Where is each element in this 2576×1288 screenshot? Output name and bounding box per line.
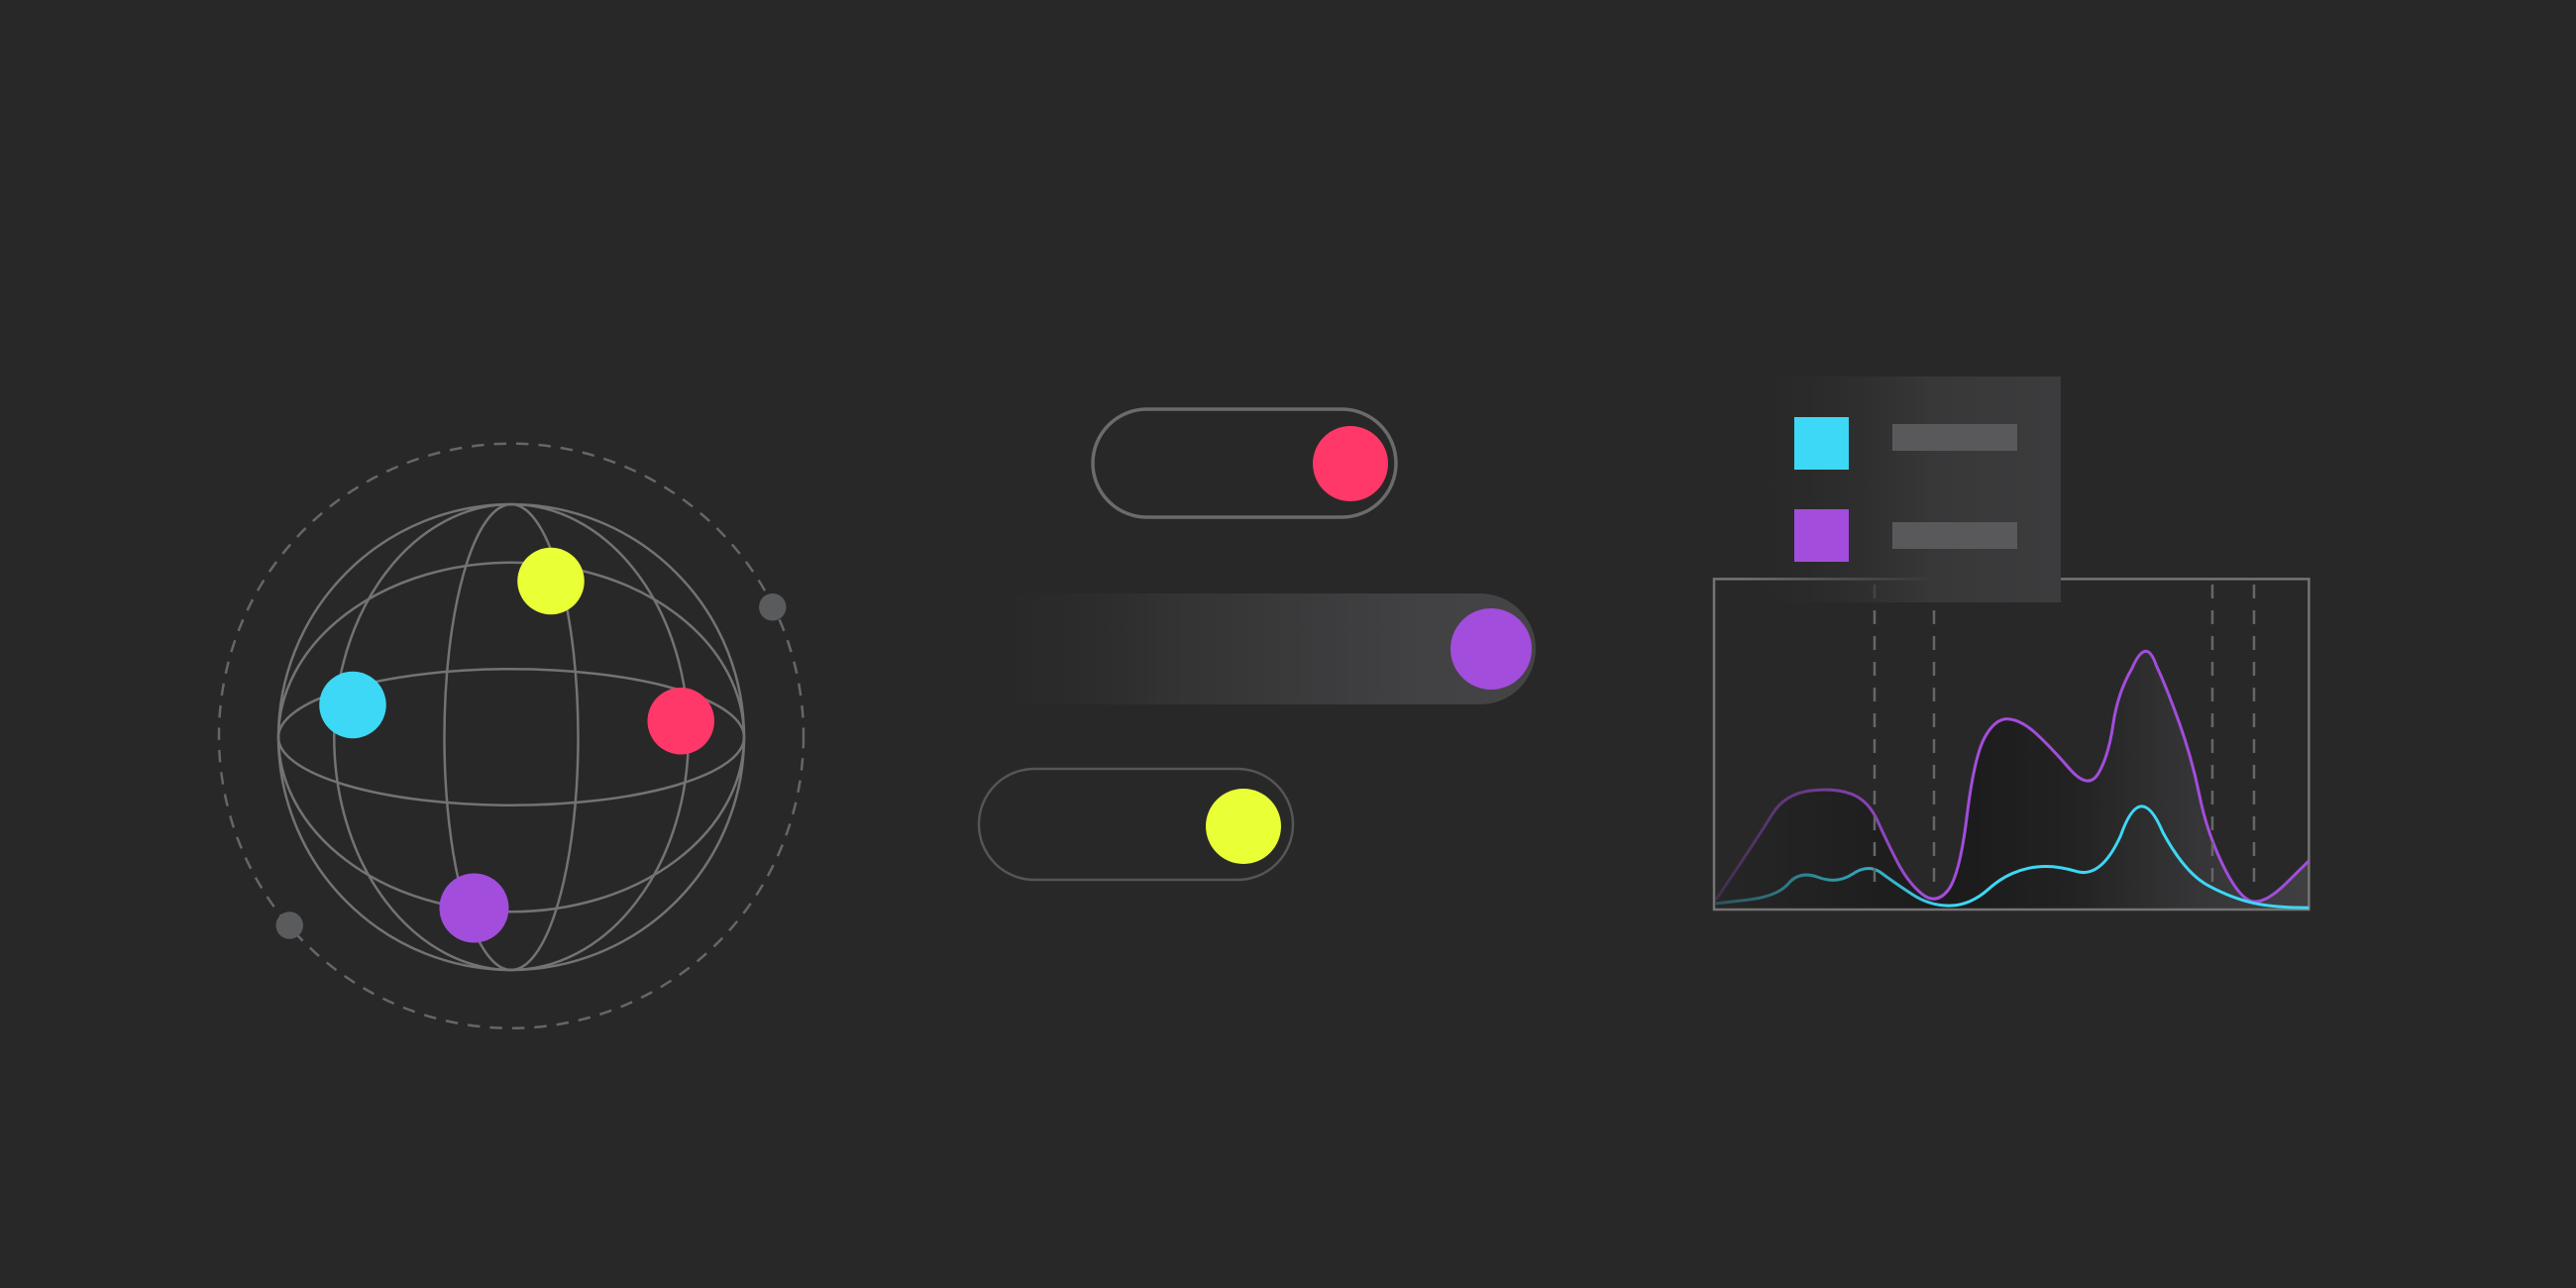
orbit satellite bottom left [275, 912, 303, 939]
globe wireframe [278, 504, 744, 970]
dashed guide lines [1875, 585, 2254, 892]
chart area fill [1716, 651, 2308, 910]
orbit satellite top right [759, 593, 787, 620]
toggle: middle (purple, active) [978, 593, 1536, 704]
dot: purple [440, 874, 509, 943]
dot: yellow [517, 548, 585, 614]
dot: red [648, 688, 714, 755]
orbit dashed circle [219, 444, 804, 1028]
toggle: bottom (yellow) [979, 769, 1293, 880]
series: purple line [1716, 651, 2308, 902]
legend: cyan label bar [1892, 424, 2017, 451]
legend: purple label bar [1892, 522, 2017, 549]
toggle: top (red) [1093, 409, 1396, 517]
legend box [1744, 376, 2061, 602]
globe [219, 444, 804, 1028]
legend: purple swatch [1794, 509, 1849, 562]
legend: cyan swatch [1794, 417, 1849, 470]
series: cyan line [1716, 806, 2308, 908]
chart [1714, 376, 2308, 910]
dot: cyan [319, 672, 386, 738]
chart frame [1714, 579, 2308, 910]
